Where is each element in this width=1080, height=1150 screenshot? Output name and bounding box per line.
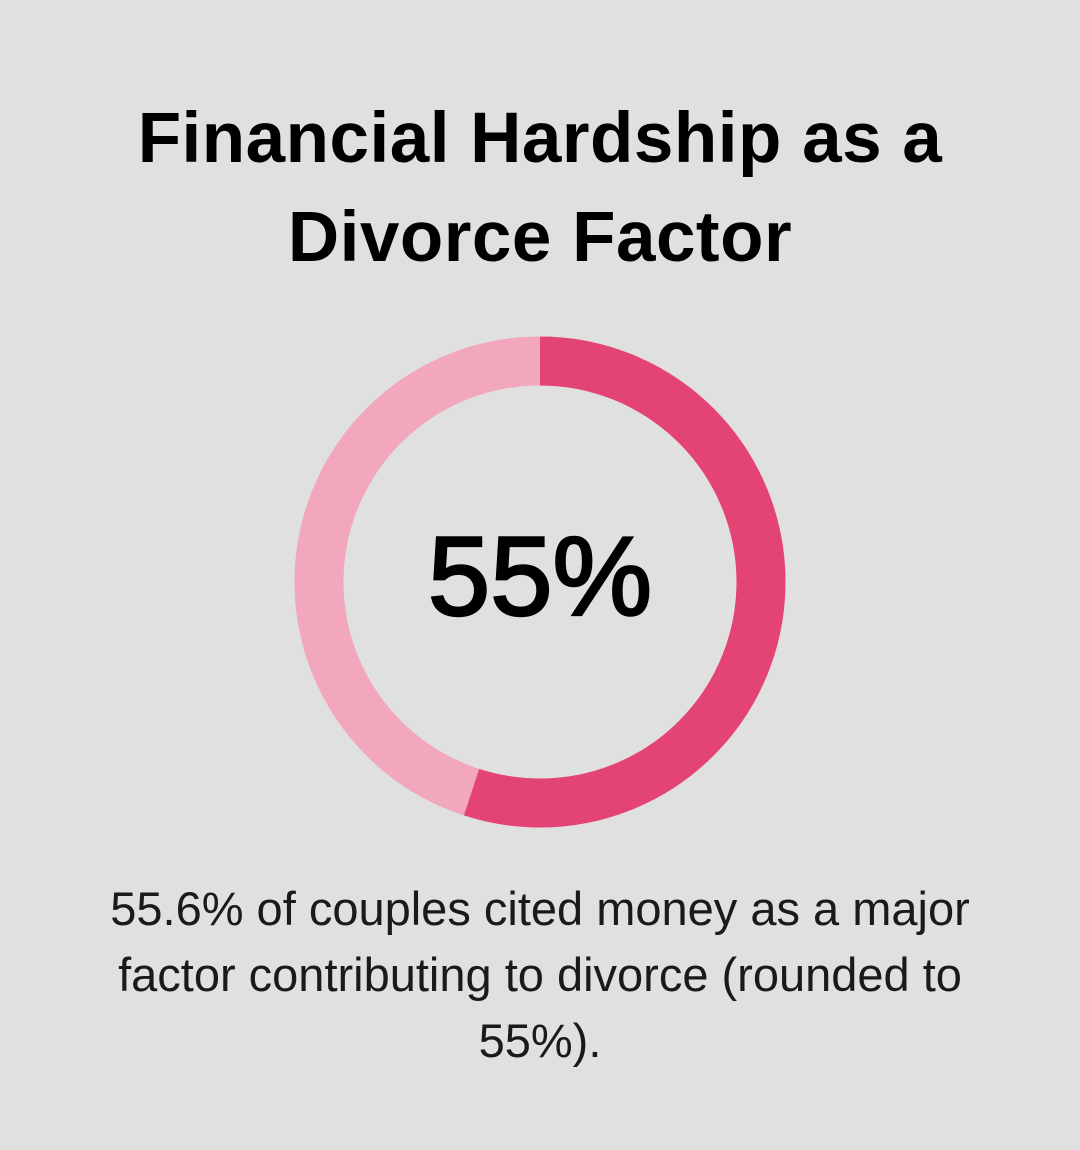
description text [110, 882, 970, 1067]
description text: 55%). [479, 1014, 601, 1067]
donut: remainder segment [319, 361, 761, 803]
title: Divorce Factor [288, 198, 792, 277]
donut chart [294, 336, 786, 828]
center value: 55% [428, 514, 652, 639]
donut: 55% segment [319, 361, 761, 803]
title: Financial Hardship as a [138, 99, 942, 178]
description text: factor contributing to divorce (rounded to [118, 948, 962, 1001]
title [138, 99, 942, 277]
description text: 55.6% of couples cited money as a major [110, 882, 970, 935]
